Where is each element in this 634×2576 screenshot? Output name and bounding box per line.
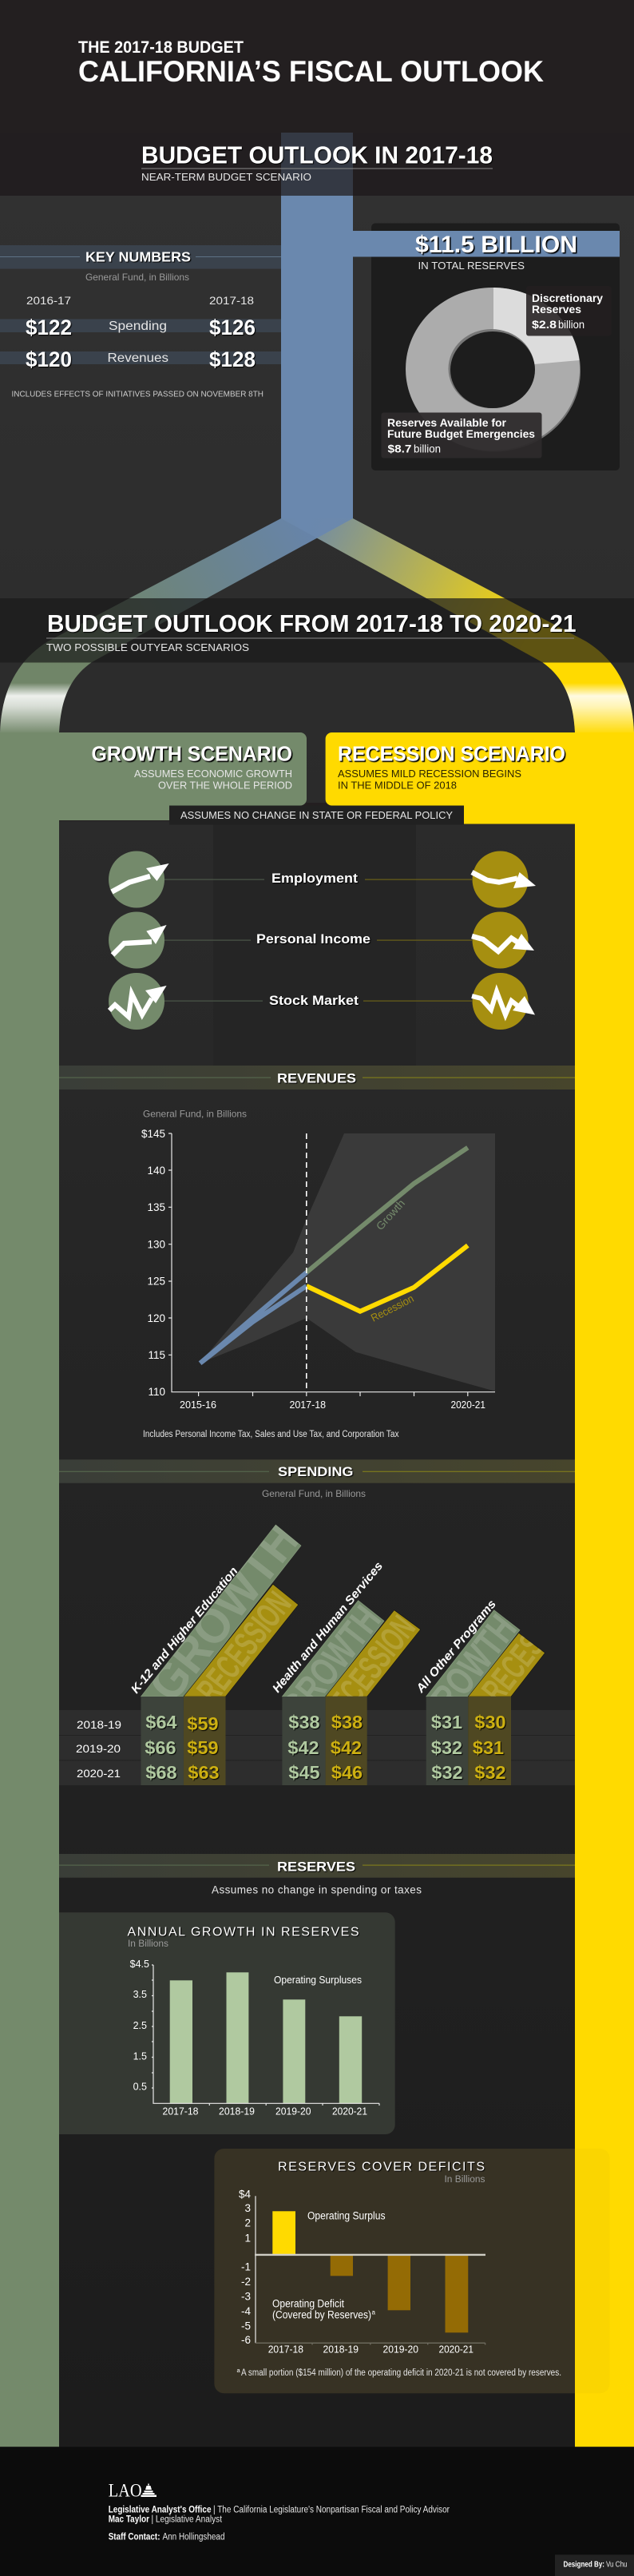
spending row: $122 [26, 316, 72, 339]
designer credit [555, 2554, 634, 2576]
growth bend highlight [0, 641, 92, 732]
bar: other recession: RECESSION [474, 1585, 584, 1709]
revenues row [0, 347, 281, 371]
bar: other growth [426, 1610, 521, 1697]
bar chart: surplus and deficits [239, 2189, 485, 2356]
line chart: revenues [141, 1128, 495, 1411]
spending values: growth: $45 [288, 1762, 320, 1783]
spending values: growth: $64 [145, 1712, 177, 1733]
y axis labels: 3 [244, 2202, 251, 2214]
spending row: Spending [109, 320, 167, 333]
y axis labels: $145 [141, 1128, 165, 1140]
footer credits: Staff Contact: [109, 2532, 160, 2542]
label: reserves for budget emergencies [382, 412, 541, 458]
donut chart [406, 288, 581, 452]
personal income label: Personal Income [256, 931, 370, 947]
panel unit: In Billions [128, 1939, 168, 1949]
x axis labels: 2019-20 [275, 2106, 311, 2118]
spending values: recession: $38 [331, 1712, 363, 1733]
spending year labels: 2018-19 [77, 1718, 121, 1731]
history lines [200, 1272, 307, 1363]
panel overlap on yellow column [575, 2149, 610, 2393]
heading: budget outlook from 2017-18 to 2020-21: TWO POSSIBLE OUTYEAR SCENARIOS [46, 642, 249, 653]
y axis labels: -2 [241, 2276, 251, 2288]
bar: other growth: GROWTH [409, 1606, 525, 1738]
axis ticks [168, 1133, 468, 1396]
column shade: k-12 growth values [141, 1697, 184, 1785]
panel: reserves cover deficits [214, 2149, 610, 2393]
section banner: spending: SPENDING [278, 1464, 353, 1479]
heading band: outlook to 2020-21 [0, 598, 634, 663]
icon: recession income arrow [472, 912, 534, 968]
column shade: health growth values [282, 1697, 326, 1785]
bar: health growth: GROWTH [273, 1598, 390, 1729]
heading: budget outlook from 2017-18 to 2020-21 [46, 609, 577, 653]
y axis labels: 125 [147, 1275, 165, 1288]
reserves banner [353, 231, 620, 257]
panel: key numbers [0, 245, 281, 399]
spending values: recession: $59 [187, 1737, 219, 1758]
y axis labels: 110 [148, 1386, 165, 1398]
panel: recession scenario: ASSUMES MILD RECESSION BEGINS [338, 768, 521, 780]
spending values: growth: $68 [145, 1762, 177, 1783]
header title block [78, 38, 544, 88]
spending values: growth: $32 [431, 1762, 463, 1783]
revenues footnote: Includes Personal Income Tax, Sales and Use Tax, and Corporation Tax [143, 1430, 399, 1439]
stock market label: Stock Market [269, 993, 359, 1008]
designer credit: Designed By: [564, 2560, 604, 2569]
growth flow leg [0, 518, 353, 732]
factor: personal income [109, 912, 534, 968]
column shade: health recession values [326, 1697, 367, 1785]
recession line [307, 1245, 468, 1312]
panel unit: In Billions [444, 2175, 485, 2185]
reserves total: $11.5 BILLION [415, 232, 577, 258]
label: discretionary reserves [526, 286, 612, 335]
zero line [255, 2254, 485, 2256]
reserves caption: IN TOTAL RESERVES [418, 260, 525, 272]
spending values: growth: $66 [145, 1737, 176, 1758]
x axis labels [268, 2344, 474, 2356]
x axis labels: 2020-21 [439, 2344, 474, 2356]
panel: annual growth in reserves [59, 1912, 395, 2134]
factor: stock market [109, 973, 535, 1030]
employment label: Employment [271, 871, 358, 886]
spending year labels: 2019-20 [76, 1742, 121, 1755]
panel: recession scenario: IN THE MIDDLE OF 2018 [338, 780, 457, 791]
y axis labels [141, 1128, 165, 1398]
section banner: spending [59, 1459, 575, 1483]
spending values: recession: $63 [188, 1762, 220, 1783]
bar: health recession [325, 1610, 421, 1697]
label: discretionary reserves: billion [558, 319, 584, 331]
label: discretionary reserves: $2.8 [532, 319, 557, 331]
column shade: k-12 recession values [184, 1697, 225, 1785]
deficit footnote: a [236, 2367, 241, 2374]
label: other programs: All Other Programs [413, 1598, 499, 1696]
footer background [0, 2447, 634, 2576]
revenues row: $128 [209, 347, 256, 371]
panel: growth scenario: GROWTH SCENARIO [91, 742, 292, 766]
spending values: recession [187, 1712, 506, 1783]
heading: budget outlook in 2017-18 [141, 141, 493, 183]
header title block: THE 2017-18 BUDGET [78, 38, 244, 57]
y axis labels: 0.5 [133, 2082, 147, 2093]
bar: health growth [281, 1600, 385, 1697]
spending year labels: 2020-21 [77, 1767, 121, 1780]
y axis labels: 115 [148, 1349, 165, 1361]
spending values: recession: $30 [474, 1712, 506, 1733]
y axis labels: 130 [147, 1238, 165, 1251]
label: reserves for budget emergencies: Future Budget Emergencies [387, 427, 535, 440]
spending values: growth: $32 [431, 1737, 462, 1758]
deficit footnote: A small portion ($154 million) of the operating deficit in 2020-21 is not covered by reserves. [241, 2368, 561, 2378]
y axis labels: -1 [241, 2261, 251, 2273]
key numbers banner [0, 245, 281, 269]
spending values: growth [145, 1712, 463, 1783]
section banner: reserves [59, 1854, 575, 1878]
y axis labels: 3.5 [133, 1989, 147, 2000]
surplus label: Operating Surplus [307, 2210, 386, 2222]
panel: growth scenario: OVER THE WHOLE PERIOD [158, 780, 292, 791]
x axis labels: 2018-19 [219, 2106, 255, 2118]
bar: k-12 recession [184, 1584, 299, 1697]
group: health and human services [270, 1559, 423, 1785]
bar: k-12 recession: RECESSION [189, 1585, 299, 1709]
bar: other recession [468, 1633, 545, 1697]
section banner: revenues [59, 1066, 575, 1090]
footer credits: | Legislative Analyst [152, 2515, 223, 2525]
heading: budget outlook from 2017-18 to 2020-21: BUDGET OUTLOOK FROM 2017-18 TO 2020-21 [47, 609, 577, 637]
revenues row: $120 [26, 347, 72, 371]
axes [172, 1133, 495, 1392]
footer credits: | The California Legislature's Nonpartisan Fiscal and Policy Advisor [213, 2506, 450, 2515]
heading: budget outlook in 2017-18: BUDGET OUTLOOK IN 2017-18 [141, 141, 493, 169]
surplus bar [272, 2211, 295, 2255]
policy assumption tab [169, 805, 464, 824]
panel: recession scenario: RECESSION SCENARIO [338, 742, 565, 766]
designer credit: Vu Chu [606, 2560, 628, 2569]
x axis labels: 2015-16 [180, 1399, 216, 1411]
x axis labels: 2017-18 [268, 2344, 303, 2356]
recession side column [575, 732, 634, 2447]
y axis labels: 140 [147, 1165, 165, 1177]
spending row [0, 316, 281, 339]
spending values: growth: $31 [431, 1712, 462, 1733]
axes [152, 1965, 379, 2106]
key numbers note: INCLUDES EFFECTS OF INITIATIVES PASSED ON NOVEMBER 8TH [11, 390, 264, 399]
growth line [307, 1148, 468, 1272]
bar: health recession: RECESSION [314, 1609, 423, 1733]
year headers: 2017-18 [209, 295, 254, 307]
group: all other programs [418, 1601, 545, 1785]
y axis labels: -4 [241, 2305, 251, 2317]
series label: Operating Surpluses [274, 1974, 362, 1986]
spending values: recession: $42 [331, 1737, 362, 1758]
column shade: other growth values [426, 1697, 468, 1785]
spending values: recession: $59 [187, 1713, 219, 1734]
label: reserves for budget emergencies: billion [414, 443, 441, 455]
y axis labels [239, 2189, 251, 2346]
y axis labels: 135 [147, 1201, 165, 1213]
y axis labels: $4.5 [130, 1959, 149, 1970]
footer credits: Legislative Analyst's Office [109, 2506, 211, 2515]
y axis labels: 120 [147, 1312, 165, 1324]
section banner: revenues: REVENUES [277, 1071, 356, 1086]
footer credits: Ann Hollingshead [163, 2532, 225, 2542]
x axis labels: 2017-18 [289, 1399, 326, 1411]
spending subtitle: General Fund, in Billions [262, 1488, 366, 1499]
LAO logo: LAO [109, 2481, 142, 2501]
bar: k-12 growth: GROWTH [138, 1513, 310, 1712]
x axis labels [180, 1399, 485, 1411]
bar chart: surpluses [130, 1959, 379, 2118]
spending values: recession: $46 [331, 1762, 363, 1783]
x axis labels: 2019-20 [383, 2344, 418, 2356]
main dark panel [59, 821, 575, 2447]
y axis labels: 2 [244, 2217, 251, 2229]
table rows: spending [59, 1710, 575, 1785]
group: k-12 and higher education [131, 1524, 302, 1785]
deficit label: (Covered by Reserves) [272, 2309, 371, 2321]
panel title: ANNUAL GROWTH IN RESERVES [128, 1925, 359, 1939]
recession line label: Recession [369, 1292, 416, 1324]
deficit label: Operating Deficit [272, 2297, 344, 2309]
heading band: budget outlook 2017-18 [0, 133, 634, 196]
panel: total reserves [353, 224, 620, 470]
label: discretionary reserves: Discretionary [532, 292, 603, 304]
y axis labels [130, 1959, 149, 2093]
axes [255, 2196, 256, 2343]
icon: growth income arrow [109, 912, 167, 968]
spending values: recession: $32 [474, 1762, 506, 1783]
header title block: CALIFORNIA’S FISCAL OUTLOOK [78, 55, 544, 88]
bars [170, 1972, 362, 2103]
blue flow bar [281, 133, 353, 518]
heading: budget outlook in 2017-18: NEAR-TERM BUDGET SCENARIO [141, 172, 311, 183]
panel: growth scenario: ASSUMES ECONOMIC GROWTH [134, 768, 292, 780]
recession flow leg [281, 518, 634, 732]
section banner: reserves: RESERVES [277, 1859, 355, 1874]
y axis labels: $4 [239, 2189, 251, 2201]
label: discretionary reserves: Reserves [532, 303, 581, 316]
bottom axis [256, 2343, 485, 2345]
label: k-12: K-12 and Higher Education [129, 1565, 241, 1697]
deficit label: a [372, 2308, 375, 2316]
reserves assumption: Assumes no change in spending or taxes [212, 1884, 422, 1896]
forecast range fan [200, 1133, 495, 1391]
icon: growth employment arrow [109, 851, 169, 907]
deficit label [272, 2297, 375, 2321]
label: reserves for budget emergencies: Reserves Available for [387, 416, 507, 429]
y axis labels: -6 [241, 2334, 251, 2346]
footer credits: Mac Taylor [109, 2515, 149, 2525]
growth line label: Growth [374, 1197, 407, 1232]
spending values: recession: $31 [473, 1737, 504, 1758]
y axis labels: -5 [241, 2320, 251, 2332]
central column of factors [213, 824, 416, 1066]
y axis labels: 1.5 [133, 2051, 147, 2062]
label: health: Health and Human Services [270, 1559, 386, 1696]
deficit bars [331, 2255, 468, 2332]
label: reserves for budget emergencies: $8.7 [388, 443, 412, 455]
footer credits [109, 2506, 450, 2542]
spending values: growth: $42 [287, 1737, 319, 1758]
panel: growth scenario [48, 732, 307, 820]
growth side column [0, 732, 59, 2447]
key numbers subtitle: General Fund, in Billions [85, 272, 189, 283]
spending values: growth: $38 [288, 1712, 320, 1733]
icon: growth stock arrow [109, 973, 167, 1030]
chart subtitle: revenues: General Fund, in Billions [143, 1109, 247, 1120]
panel title: RESERVES COVER DEFICITS [278, 2161, 485, 2174]
revenues row: Revenues [107, 351, 168, 365]
icon: recession employment arrow [472, 851, 536, 907]
spending year labels [76, 1718, 121, 1780]
y axis labels: -3 [241, 2291, 251, 2303]
panel: recession scenario [326, 732, 586, 824]
recession bend highlight [542, 641, 634, 732]
x axis labels: 2017-18 [163, 2106, 199, 2118]
policy assumption tab: ASSUMES NO CHANGE IN STATE OR FEDERAL POLICY [180, 810, 454, 821]
year headers: 2016-17 [26, 295, 71, 307]
year headers [26, 295, 254, 307]
column shade: other recession values [468, 1697, 511, 1785]
x axis labels: 2020-21 [450, 1399, 485, 1411]
forecast divider [306, 1133, 307, 1392]
factor: employment [109, 851, 536, 907]
x axis labels [163, 2106, 367, 2118]
x axis labels: 2020-21 [332, 2106, 367, 2118]
spending row: $126 [209, 316, 256, 339]
key numbers banner: KEY NUMBERS [85, 249, 191, 265]
icon: recession stock arrow [472, 973, 535, 1030]
x axis labels: 2018-19 [323, 2344, 359, 2356]
y axis labels: 1 [244, 2232, 251, 2244]
y axis labels: 2.5 [133, 2020, 147, 2031]
icon: capitol dome [141, 2483, 157, 2497]
